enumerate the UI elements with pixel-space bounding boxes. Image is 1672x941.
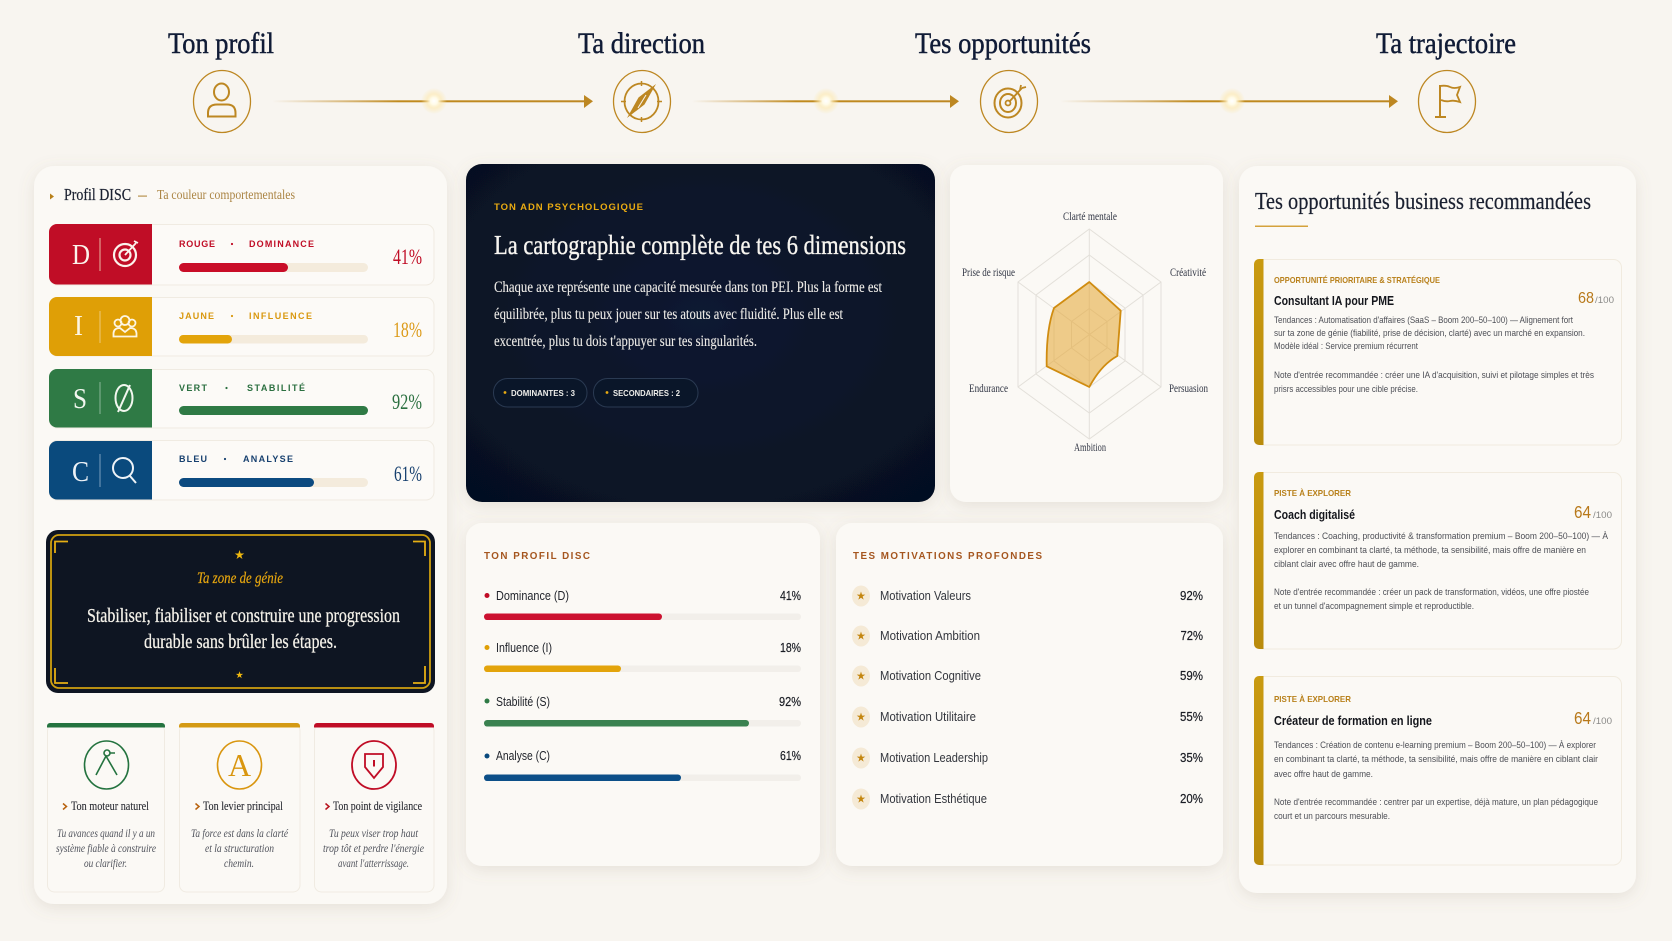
bar: analyse: Analyse (C) [496,749,550,763]
card: Ton point de vigilance: Ton point de vigilance [333,799,422,813]
radar labels: Créativité [1170,265,1206,279]
motivation: utilitaire: Motivation Utilitaire [880,710,976,724]
description: avec offre haut de gamme. [1274,769,1373,779]
paragraph: excentrée, plus tu dois t'appuyer sur tes singularités. [494,333,757,350]
bar: dominance: Dominance (D) [496,589,569,603]
bar: stabilité: 92% [779,695,801,709]
motivation: leadership: Motivation Leadership [880,751,988,765]
row: D dominance: ROUGE [179,239,215,249]
description: en combinant ta clarté, ta méthode, ta sensibilité, mais offre de manière en ciblant clair [1274,754,1598,764]
score: 64 [1574,708,1591,728]
description: Tendances : Coaching, productivité & transformation premium – Boom 200–50–100) — À [1274,531,1609,541]
motivation: utilitaire: 55% [1180,710,1203,724]
radar data shape [1047,282,1121,387]
paragraph [494,279,883,350]
heading: La cartographie complète de tes 6 dimensions [494,230,906,260]
score: /100 [1593,716,1612,727]
card: Ton moteur naturel: ou clarifier. [84,858,127,870]
icon: person [194,70,250,132]
bar: analyse: 61% [780,749,801,763]
score [1574,502,1612,522]
row: I influence: I [74,311,83,342]
icon: balance [116,385,132,412]
panel: Ton profil DISC [466,523,820,866]
icon: shield [352,741,396,789]
motivation: cognitive: 59% [1180,669,1203,683]
card: Ton levier principal: et la structuration [205,843,274,855]
score: /100 [1595,295,1614,306]
card: Ton point de vigilance: avant l'atterrissage. [338,858,409,870]
radar labels: Endurance [969,381,1008,395]
panel: radar chart [950,165,1223,502]
icon: magnifier [113,458,136,483]
motivation: ambition [852,626,1203,646]
panel: Tes motivations profondes [836,523,1223,866]
description: et un tunnel d'acompagnement simple et reproductible. [1274,601,1474,611]
description: ciblant clair avec offre haut de gamme. [1274,559,1419,569]
description: Modèle idéal : Service premium récurrent [1274,341,1418,351]
row: C analyse [49,440,434,500]
radar labels: Persuasion [1169,381,1208,395]
header: step Tes opportunités [915,27,1091,132]
bar: influence [484,641,801,672]
opportunity: Consultant IA pour PME: OPPORTUNITÉ PRIORITAIRE & STRATÉGIQUE [1274,275,1440,285]
callout: Ta zone de génie: Ta zone de génie [197,570,283,587]
paragraph: Chaque axe représente une capacité mesurée dans ton PEI. Plus la forme est [494,279,883,296]
icon: flag [1418,70,1476,132]
card: Ton levier principal: chemin. [224,858,254,870]
icon: star [236,671,243,678]
description: Tendances : Création de contenu e-learning premium – Boom 200–50–100) — À explorer [1274,740,1596,750]
opportunity: Coach digitalisé: Coach digitalisé [1274,507,1355,522]
opportunity: Créateur de formation en ligne [1254,676,1622,865]
icon: target [114,241,138,266]
heading: Ta direction [578,27,705,60]
opportunity: Consultant IA pour PME [1254,259,1622,445]
header: step Ton profil [168,27,274,132]
description: Note d'entrée recommandée : créer un pack de transformation, vidéos, une offre piostée [1274,587,1589,597]
icon: letter A: A [228,747,251,783]
row: I influence: JAUNE [179,311,214,321]
callout: Ta zone de génie: Stabiliser, fiabiliser et construire une progression [87,606,400,627]
icon: figure [84,741,128,789]
opportunity: Coach digitalisé [1254,472,1622,649]
panel: opportunités business [1239,166,1636,893]
row: I influence: 18% [393,317,422,342]
motivation: esthétique [852,788,1203,810]
row: S stabilité: VERT [179,383,208,393]
card: Ton levier principal: Ton levier principal [203,799,283,813]
radar labels: Prise de risque [962,265,1015,279]
row: C analyse: C [72,457,89,488]
motivation: cognitive: Motivation Cognitive [880,669,981,683]
panel: ADN psychologique [466,164,935,502]
icon: target [980,70,1038,132]
arrow 2 [692,88,959,114]
motivation: esthétique: 20% [1180,792,1203,806]
motivation: cognitive [852,666,1203,686]
description: explorer en combinant ta clarté, ta méthode, ta sensibilité, mais offre de manière en [1274,545,1586,555]
card: Ton moteur naturel: Ton moteur naturel [71,799,149,813]
icon: star [235,550,244,559]
panel heading: Ta couleur comportementales [157,187,295,202]
pill: dominantes [494,378,587,407]
icon: people [114,316,136,336]
bar: influence: 18% [780,641,801,655]
header: step Ta direction [578,27,705,132]
bar: analyse [484,749,801,781]
description: prisrs accessibles pour une cible précise. [1274,384,1418,394]
arrow 3 [1060,88,1398,114]
opportunity: Créateur de formation en ligne: Créateur de formation en ligne [1274,713,1432,728]
row: D dominance: D [72,240,90,271]
motivation: utilitaire [852,706,1203,728]
radar grid [1018,229,1161,439]
row: S stabilité: S [73,384,87,415]
description: Tendances : Automatisation d'affaires (SaaS – Boom 200–50–100) — Alignement fort [1274,315,1573,325]
description: Note d'entrée recommandée : centrer par un expertise, déjà mature, un plan pédagogique [1274,797,1598,807]
pill: secondaires [594,378,698,407]
score [1578,290,1614,307]
card: Ton levier principal: Ta force est dans la clarté [191,828,289,840]
description: Note d'entrée recommandée : créer une IA d'acquisition, suivi et pilotage simples et très [1274,370,1594,380]
card: Ton point de vigilance: trop tôt et perdre l'énergie [323,843,424,855]
heading: Tes opportunités [915,27,1091,60]
card: Ton point de vigilance: Tu peux viser trop haut [329,828,419,840]
pill: secondaires: SECONDAIRES : 2 [613,388,680,398]
bar: influence: Influence (I) [496,641,552,655]
card: Ton moteur naturel: Tu avances quand il y a un [57,828,155,840]
arrow 1 [272,88,593,114]
panel: Ton profil DISC: TON PROFIL DISC [484,551,590,562]
motivation: leadership: 35% [1180,751,1203,765]
motivation: leadership [852,748,1203,768]
card: Ton moteur naturel [47,723,165,892]
description: sur ta zone de génie (fiabilité, prise de décision, clarté) avec un marché en expansion. [1274,328,1585,338]
paragraph: équilibrée, plus tu peux jouer sur tes atouts avec fluidité. Plus elle est [494,306,844,323]
callout: Ta zone de génie: durable sans brûler les étapes. [144,632,337,653]
score [1574,708,1612,728]
motivation: valeurs: 92% [1180,589,1203,603]
panel heading: Profil DISC [64,185,131,204]
radar labels: Ambition [1074,440,1106,454]
score: 64 [1574,502,1591,522]
score: 68 [1578,290,1594,307]
opportunity: Consultant IA pour PME: Consultant IA pour PME [1274,293,1394,308]
bar: stabilité: Stabilité (S) [496,695,550,709]
row: I influence: INFLUENCE [249,311,312,321]
pill: dominantes: DOMINANTES : 3 [511,388,575,398]
panel: ADN psychologique: TON ADN PSYCHOLOGIQUE [494,202,643,213]
opportunity: Créateur de formation en ligne: PISTE À EXPLORER [1274,694,1351,704]
header: step Ta trajectoire [1376,27,1516,132]
heading: Tes opportunités business recommandées [1255,189,1591,215]
panel: Tes motivations profondes: TES MOTIVATIONS PROFONDES [853,551,1042,562]
card: Ton moteur naturel: système fiable à construire [56,843,156,855]
row: D dominance [49,224,434,285]
row: S stabilité [49,369,434,428]
radar labels: Clarté mentale [1063,209,1117,223]
icon: letter A [218,741,262,789]
row: C analyse: 61% [394,461,422,486]
row: S stabilité: STABILITÉ [247,383,305,393]
row: D dominance: DOMINANCE [249,239,314,249]
bar: dominance: 41% [780,589,801,603]
description [1274,531,1609,611]
motivation: ambition: Motivation Ambition [880,629,980,643]
row: C analyse: BLEU [179,454,207,464]
motivation: esthétique: Motivation Esthétique [880,792,987,806]
motivation: valeurs: Motivation Valeurs [880,589,971,603]
callout: Ta zone de génie [46,530,435,693]
panel heading [50,185,295,204]
row: D dominance: 41% [393,244,422,269]
motivation: ambition: 72% [1180,629,1203,643]
row: S stabilité: 92% [392,389,422,414]
description: court et un parcours mesurable. [1274,811,1390,821]
description [1274,740,1598,821]
icon: compass [614,70,670,132]
heading: Ton profil [168,27,274,60]
row: C analyse: ANALYSE [243,454,293,464]
bar: stabilité [484,695,801,726]
row: I influence [49,297,434,356]
radar labels [962,209,1208,454]
motivation: valeurs [852,586,1203,606]
description [1274,315,1594,394]
card: Ton point de vigilance [314,723,434,892]
panel: Profil DISC [34,166,447,904]
opportunity: Coach digitalisé: PISTE À EXPLORER [1274,488,1351,498]
score: /100 [1593,510,1612,521]
heading: Ta trajectoire [1376,27,1516,60]
bar: dominance [484,589,801,620]
card: Ton levier principal [179,723,300,892]
